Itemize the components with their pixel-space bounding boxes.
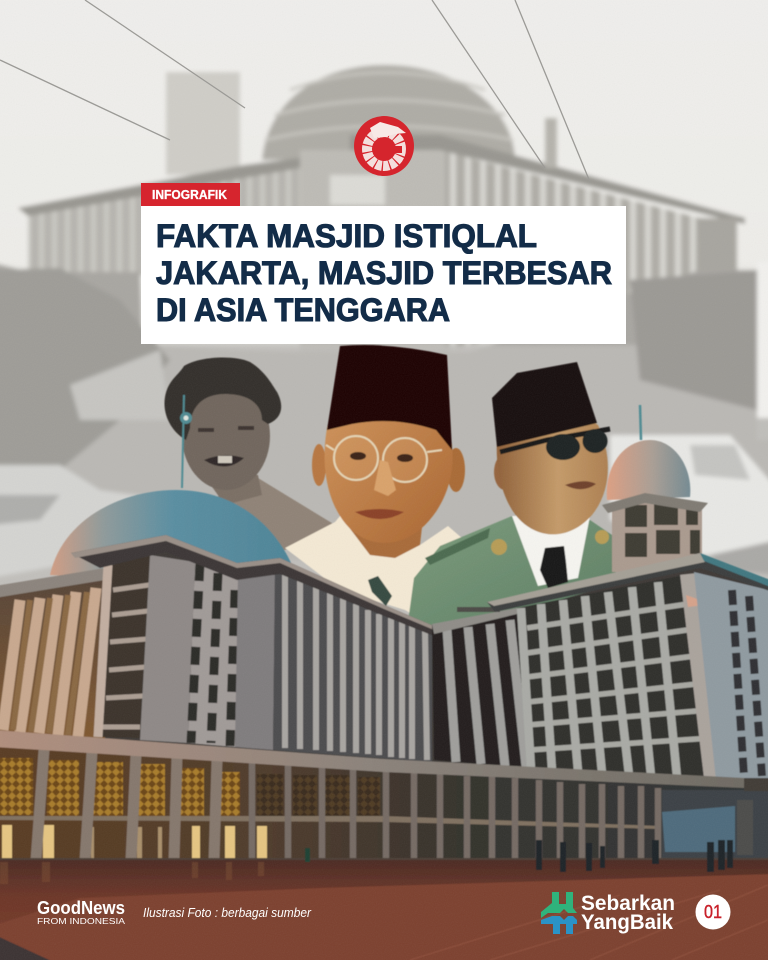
tie: [368, 576, 392, 606]
doors: [2, 825, 267, 860]
page number badge: [696, 894, 730, 930]
page number badge: 01: [704, 902, 722, 922]
portrait: right man with sunglasses and uniform: [408, 362, 618, 630]
footer logo: GoodNews from Indonesia: [37, 898, 125, 926]
gold lattice panels: [0, 758, 240, 821]
title panel: [141, 206, 626, 344]
ears: [312, 444, 326, 486]
eyes, nose, mouth: [350, 452, 366, 460]
foreground photo collage: [0, 345, 768, 960]
small dome and minaret pavilion: [602, 405, 708, 572]
title: FAKTA MASJID ISTIQLAL: [156, 218, 537, 254]
section between tower one and centre: [273, 566, 432, 762]
glasses: [326, 436, 442, 482]
photo credit: Ilustrasi Foto : berbagai sumber: [143, 905, 312, 920]
ear: [494, 454, 516, 490]
neck: [342, 500, 425, 558]
right tower grid: [517, 573, 720, 778]
lower floor: [0, 745, 768, 862]
icon: Sebarkan Yang Baik mark: [541, 892, 577, 934]
white shirt: [285, 510, 470, 625]
title: [156, 218, 612, 328]
white shirt: [512, 516, 590, 586]
tag: infografik: INFOGRAFIK: [152, 188, 227, 202]
visitors in the plaza: [305, 840, 733, 872]
portrait: left man in grey: [164, 357, 340, 550]
right tower roof: [487, 553, 768, 612]
title: JAKARTA, MASJID TERBESAR: [156, 255, 612, 291]
centre section: [432, 607, 528, 768]
footer logo: GoodNews from Indonesia: FROM INDONESIA: [37, 916, 125, 926]
van right: [610, 435, 768, 555]
dark foliage and mid ground: [0, 262, 768, 560]
campaign text: Sebarkan Yang Baik: Sebarkan: [581, 892, 675, 915]
old photo roof of shed: [70, 350, 170, 420]
sunglasses: [500, 429, 610, 460]
face: [325, 405, 453, 543]
footer logo: GoodNews from Indonesia: GoodNews: [37, 898, 125, 918]
title: DI ASIA TENGGARA: [156, 292, 450, 328]
right blue-lit hall: [662, 790, 768, 860]
plaza ground: [0, 860, 768, 960]
uniform jacket: [408, 516, 618, 630]
tower one: [98, 555, 275, 750]
black tie: [540, 546, 568, 588]
lintels: [0, 816, 660, 829]
old mosque roof and walls: [18, 118, 745, 355]
face: [497, 420, 608, 534]
tower one roof: [71, 535, 434, 636]
logo: red round emblem: [354, 116, 414, 176]
epaulette pins: [491, 539, 507, 555]
wires: [0, 0, 590, 182]
left wing: [0, 568, 105, 740]
campaign text: Sebarkan Yang Baik: [581, 892, 675, 934]
main mosque building: [0, 535, 768, 862]
right tower side wall: [694, 572, 768, 784]
peci: [327, 345, 452, 450]
building back fill: [0, 540, 768, 860]
billboard right edge: [757, 262, 768, 418]
portrait: centre man in glasses and peci: [285, 345, 470, 625]
canopy band: [0, 730, 744, 788]
old mosque dome: [262, 65, 515, 160]
base line: [0, 858, 768, 862]
antenna with star: [180, 395, 192, 488]
campaign text: Sebarkan Yang Baik: YangBaik: [581, 911, 673, 934]
cars left: [0, 465, 170, 578]
blue dome: [50, 490, 292, 580]
old mosque scaffolding: [166, 72, 240, 175]
tag: infografik: [141, 183, 240, 206]
columns: [36, 750, 217, 860]
peci: [492, 362, 597, 447]
